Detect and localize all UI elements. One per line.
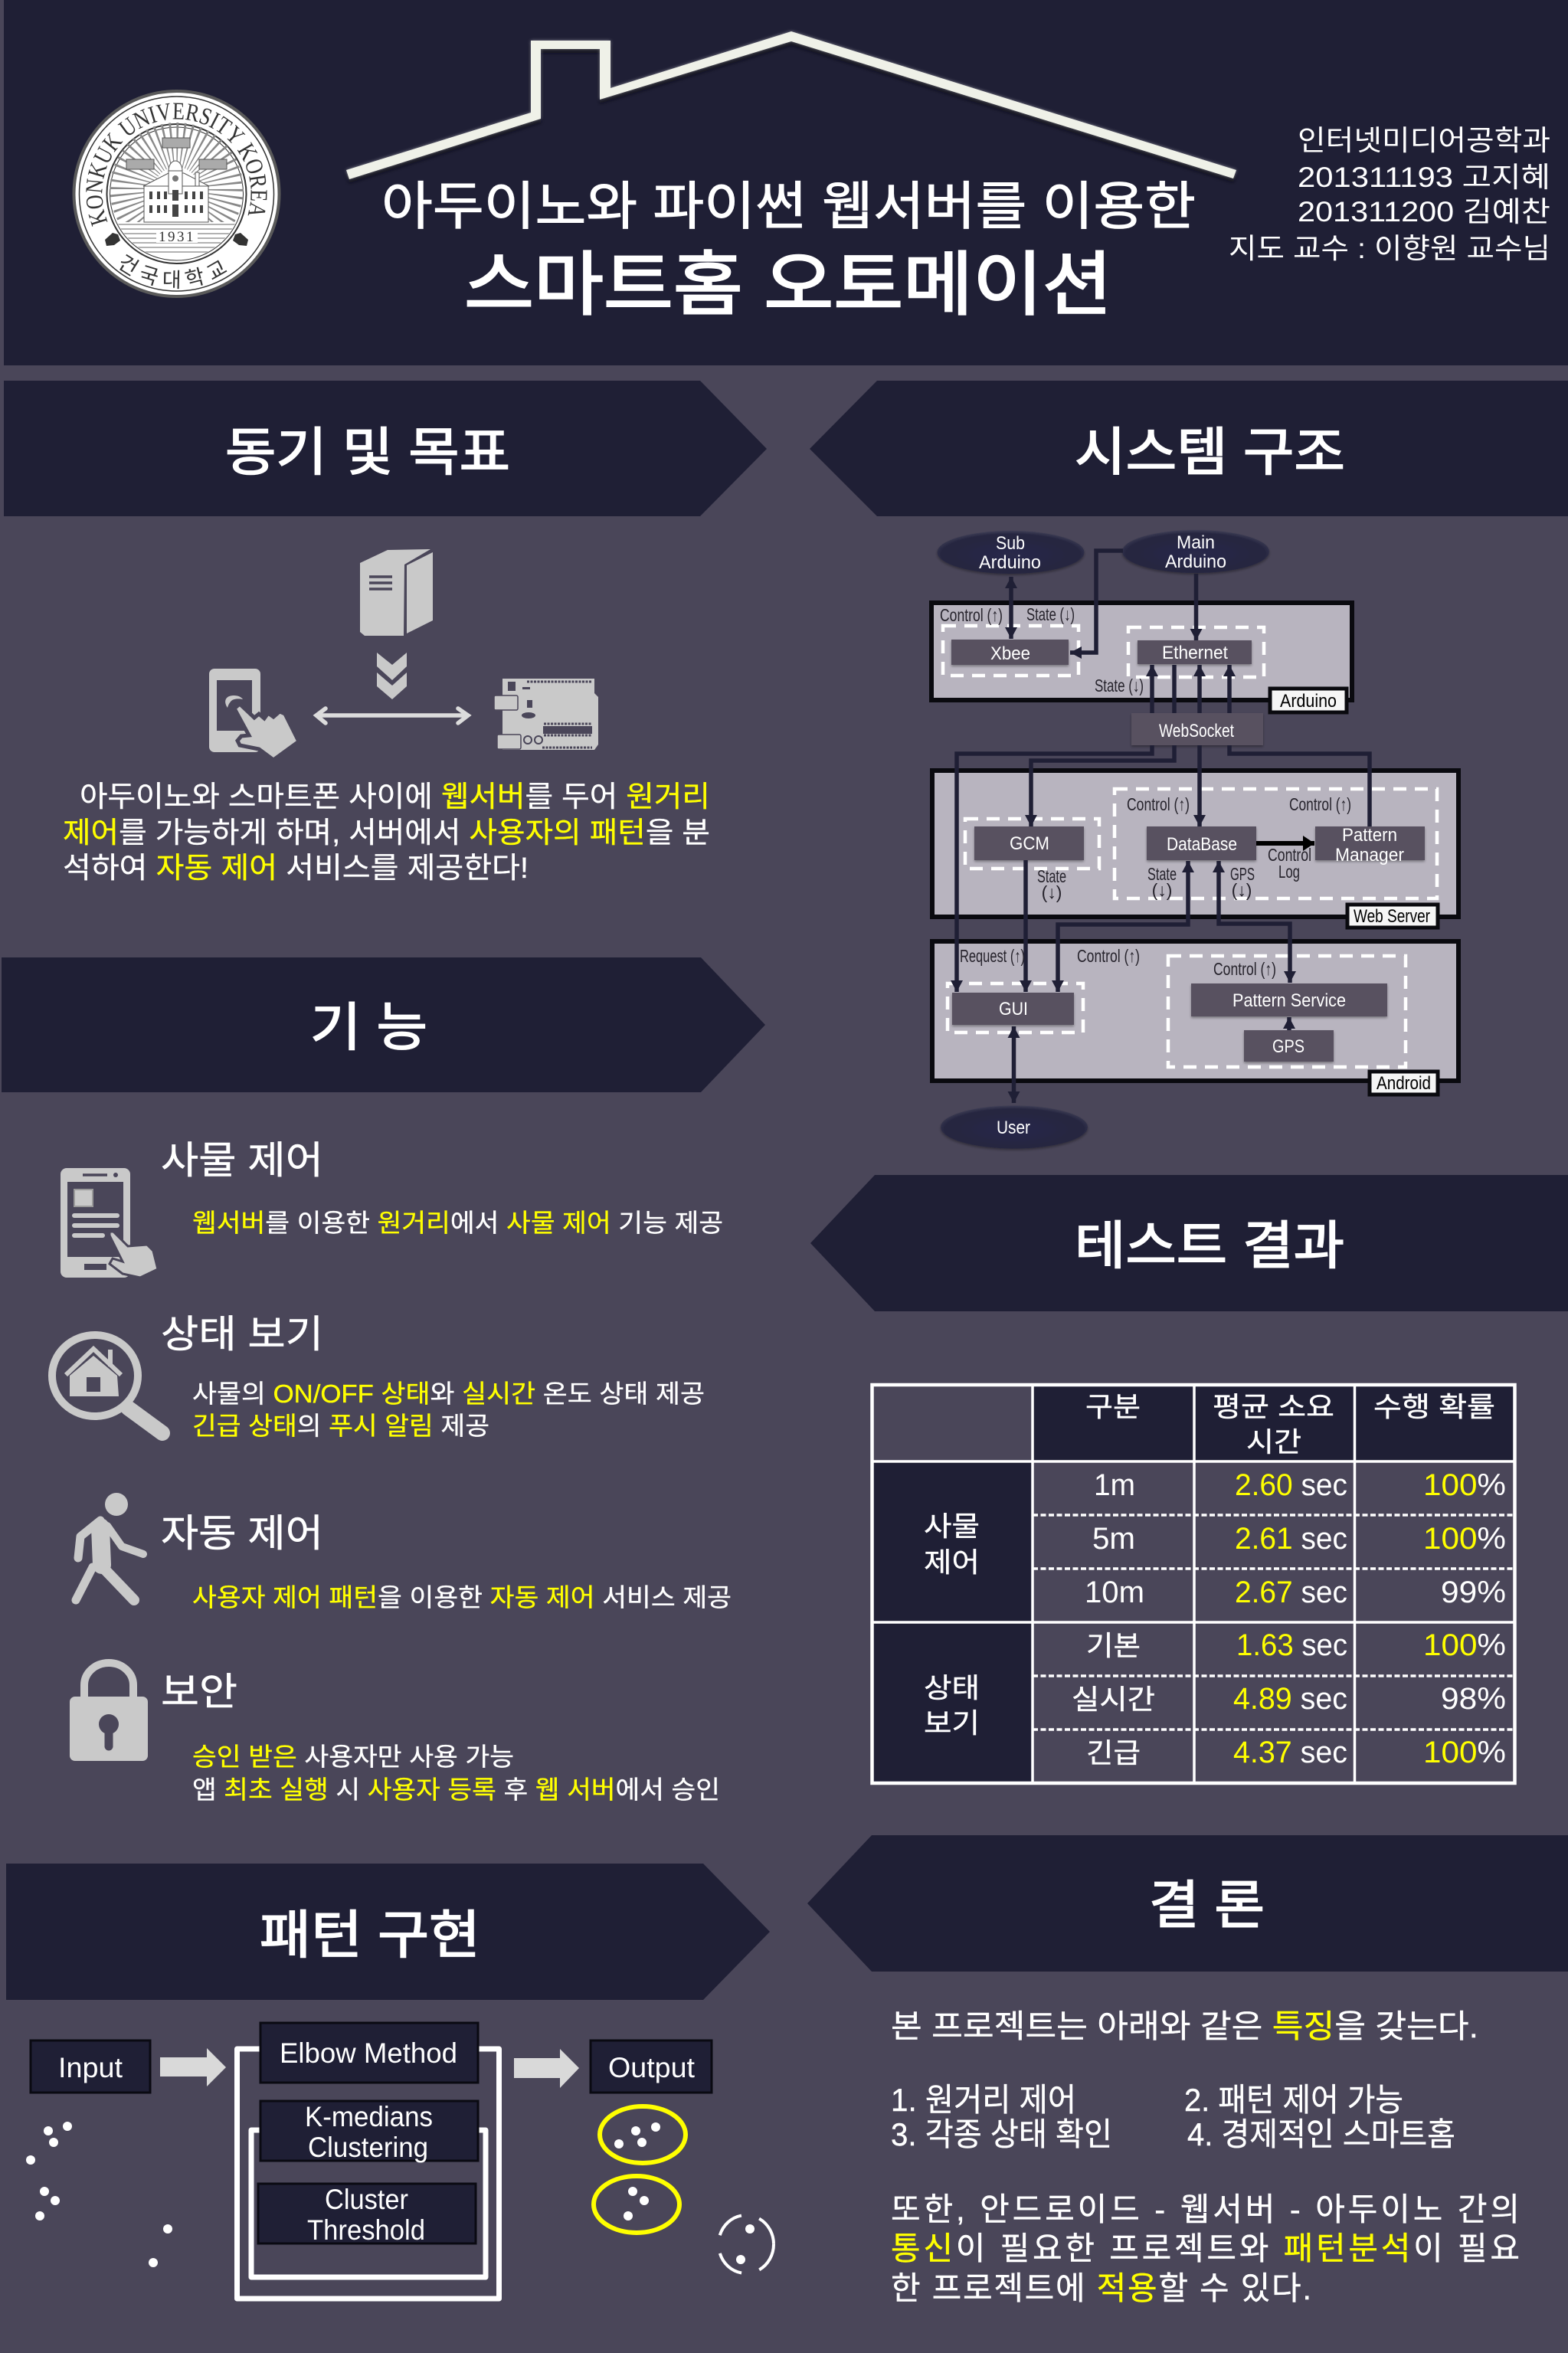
arrow: phone to arduino [316,709,468,723]
row: 1m: 2.60 sec [1235,1468,1347,1502]
panel: features [52,1139,732,1804]
box: websocket [1131,713,1263,745]
arrows [957,551,1370,1103]
row: 10m: 99% [1441,1576,1506,1609]
row group labels: 제어 [924,1546,980,1578]
diagram labels: Control (↑) [1213,959,1276,979]
banner: 결론 [807,1835,1568,1972]
panel: motivation [63,549,710,885]
text: 보안: 승인 받은 사용자만 사용 가능 [192,1743,514,1771]
diagram labels: State (↓) [1095,676,1144,695]
text block: conclusion: 4. 경제적인 스마트홈 [1187,2116,1455,2152]
heading: 보안: 보안 [161,1671,237,1713]
box: ethernet [1138,640,1252,664]
row: 5m: 2.61 sec [1235,1522,1347,1556]
arrow: process to output [514,2049,579,2088]
icon: double chevron [377,653,407,699]
banner: 시스템 구조 [810,381,1568,516]
banner: 기능 [2,957,765,1092]
text: motivation: 석하여 자동 제어 서비스를 제공한다! [63,853,529,885]
chart: pattern flow [26,2023,774,2299]
seal lettering [86,103,267,290]
main title [381,178,1196,324]
box: input: Input [58,2052,123,2083]
main title: 아두이노와 파이썬 웹서버를 이용한 [381,178,1196,236]
ellipse: main arduino: Main [1177,532,1215,553]
row: 기본: 100% [1423,1628,1506,1662]
row: 기본: 1.63 sec [1236,1628,1347,1662]
ellipse: sub arduino: Arduino [979,552,1041,573]
diagram labels: State (↓) [1026,604,1075,624]
row: 10m: 10m [1085,1576,1144,1609]
box: websocket: WebSocket [1159,721,1234,741]
authors: 지도 교수 : 이향원 교수님 [1229,233,1550,264]
heading: 사물 제어: 사물 제어 [161,1139,323,1182]
text block: conclusion: 또한, 안드로이드 - 웹서버 - 아두이노 간의 [891,2191,1520,2227]
box: k-medians clustering [260,2101,478,2163]
text: 상태 보기: 긴급 상태의 푸시 알림 제공 [192,1412,489,1440]
box: k-medians clustering: Clustering [308,2132,428,2163]
text: 자동 제어: 사용자 제어 패턴 을 이용한 자동 제어 서비스 제공 [192,1583,732,1612]
banner: 패턴 구현: 패턴 구현 [260,1906,480,1965]
box: gps [1244,1030,1334,1062]
row: 5m [1092,1522,1506,1556]
ellipse: main arduino [1122,530,1269,573]
row group labels: 보기 [924,1707,980,1739]
banner: 패턴 구현 [6,1864,770,2000]
main title: 스마트홈 오토메이션 [464,247,1112,324]
diagram labels: Control (↑) [1289,794,1351,814]
seal water lines [111,224,242,252]
table headers: 수행 확률 [1373,1391,1495,1422]
text: 상태 보기 [192,1379,705,1440]
box: database: DataBase [1167,834,1237,855]
box: xbee: Xbee [990,643,1030,664]
text: 사물 제어: 웹서버를 이용한 원거리에서 사물 제어 기능 제공 [192,1209,723,1237]
box: output [591,2040,712,2093]
row: 5m: 100% [1423,1522,1506,1556]
row: 1m: 100% [1423,1468,1506,1502]
seal animals [105,233,248,246]
row: 기본: 기본 [1086,1630,1141,1661]
box: gps: GPS [1272,1036,1304,1057]
box: database [1147,826,1256,860]
box: cluster threshold: Cluster [325,2184,408,2215]
loop frame: inner [251,2130,486,2277]
icon: magnifier house [52,1335,162,1433]
diagram labels: Log [1278,862,1300,882]
diagram labels: Request (↑) [960,946,1025,966]
ellipse: sub arduino: Sub [996,533,1025,554]
table: test results [871,1384,1516,1784]
box: pattern manager [1315,825,1425,866]
box: ethernet: Ethernet [1162,643,1228,663]
diagram labels: Control (↑) [940,605,1003,625]
text block: conclusion: 3. 각종 상태 확인 [891,2116,1112,2152]
row: 긴급 [1086,1736,1506,1769]
row: 긴급: 4.37 sec [1233,1736,1347,1769]
system box: android [932,941,1458,1081]
text: motivation: 아두이노와 스마트폰 사이에 웹서버를 두어 원거리 [80,781,710,813]
box: pattern manager: Pattern [1342,825,1397,846]
box: cluster threshold [258,2184,476,2246]
output clusters [594,2106,774,2273]
row: 1m: 1m [1094,1468,1135,1502]
diagram labels: (↓) [1042,882,1062,902]
box: gcm [974,826,1084,860]
table headers: 시간 [1246,1426,1301,1458]
box: gcm: GCM [1010,833,1049,854]
box: pattern service: Pattern Service [1232,990,1346,1011]
icon: phone touch [209,669,299,760]
banner: 테스트 결과 [810,1175,1568,1311]
ellipse: user [941,1106,1088,1149]
box: elbow method: Elbow Method [280,2037,457,2069]
table headers: 구분 [1085,1391,1141,1422]
text block: conclusion: 1. 원거리 제어 [891,2082,1076,2118]
text: 보안 [192,1743,720,1804]
row: 실시간: 4.89 sec [1233,1682,1347,1716]
authors: 201311200 김예찬 [1298,196,1550,227]
table headers: 평균 소요 [1213,1391,1334,1422]
header panel [4,0,1568,365]
row: 실시간: 98% [1441,1682,1506,1716]
chart: system architecture diagram [931,530,1458,1149]
heading: 자동 제어: 자동 제어 [161,1512,323,1555]
authors [1229,125,1550,264]
tag: android: Android [1377,1073,1431,1094]
ellipse: sub arduino [938,531,1085,574]
roof outline [346,31,1236,183]
university seal [72,90,280,298]
text: 보안: 앱 최초 실행 시 사용자 등록 후 웹 서버에서 승인 [192,1775,720,1804]
box: xbee [951,640,1069,665]
box: k-medians clustering: K-medians [305,2101,433,2132]
diagram labels: (↓) [1152,880,1172,900]
loop frame: outer [237,2049,499,2299]
box: cluster threshold: Threshold [307,2214,425,2246]
tag: web server: Web Server [1354,906,1430,927]
row: 10m [1085,1576,1506,1609]
row: 실시간 [1072,1682,1506,1716]
authors: 201311193 고지혜 [1298,162,1550,193]
box: elbow method [260,2023,478,2083]
seal year: 1931 [159,229,195,245]
header fills [871,1384,1516,1784]
banner: 테스트 결과: 테스트 결과 [1075,1217,1344,1275]
row: 1m [1094,1468,1506,1502]
authors: 인터넷미디어공학과 [1298,125,1550,156]
box: gui [952,993,1074,1025]
seal books [126,138,227,169]
seal building [143,161,209,222]
icon: walker [76,1493,143,1600]
text: motivation: 제어를 가능하게 하며, 서버에서 사용자의 패턴 을 분 [63,817,710,849]
dashed groups [943,626,1437,1067]
diagram labels: (↓) [1232,880,1252,900]
system box: web server [932,771,1458,917]
system box: arduino [931,603,1352,700]
ellipse: user: User [997,1118,1030,1138]
diagram labels: GPS [1230,864,1255,884]
banner: 동기 및 목표: 동기 및 목표 [225,424,510,482]
icon: arduino board [494,679,598,750]
text block: conclusion: 본 프로젝트는 아래와 같은 특징을 갖는다. [891,2008,1478,2044]
diagram labels: State [1147,864,1177,884]
box: pattern manager: Manager [1335,845,1404,866]
diagram labels: Control (↑) [1077,946,1140,966]
row group labels [924,1510,980,1739]
icon: server [360,549,433,636]
diagram labels [940,604,1351,979]
text block: conclusion: 2. 패턴 제어 가능 [1184,2082,1403,2118]
banner: 시스템 구조: 시스템 구조 [1075,424,1345,482]
text: motivation [63,781,710,885]
banner: 기능: 기 능 [310,999,427,1057]
seal lettering: 건국대학교 [119,254,227,290]
text block: conclusion: 한 프로젝트에 적용할 수 있다. [891,2270,1311,2306]
banner: 동기 및 목표 [4,381,767,516]
row: 기본 [1086,1628,1506,1662]
heading: 상태 보기: 상태 보기 [161,1313,323,1356]
diagram labels: Control (↑) [1127,794,1190,814]
grid lines [871,1384,1516,1784]
tag: arduino: Arduino [1280,691,1337,712]
box: pattern service [1191,983,1387,1016]
table headers [1085,1391,1495,1458]
row group labels: 사물 [924,1510,980,1542]
row: 5m: 5m [1092,1522,1135,1556]
arrow: input to process [160,2048,226,2086]
text block: conclusion [891,2008,1520,2306]
banner: 결론: 결 론 [1149,1877,1265,1935]
text block: conclusion: 통신이 필요한 프로젝트와 패턴분석이 필요 [891,2230,1520,2266]
box: input [31,2040,150,2093]
row: 실시간: 실시간 [1072,1684,1155,1715]
row: 긴급: 100% [1423,1736,1506,1769]
seal lettering: KONKUK UNIVERSITY KOREA [86,103,267,227]
icon: phone [61,1168,158,1278]
input points [26,2122,172,2267]
diagram labels: State [1037,866,1066,886]
ellipse: main arduino: Arduino [1165,551,1226,572]
row: 10m: 2.67 sec [1235,1576,1347,1609]
icon: lock [70,1663,148,1761]
row: 긴급: 긴급 [1086,1737,1141,1769]
diagram labels: Control [1268,845,1311,865]
box: gui: GUI [999,999,1028,1019]
row group labels: 상태 [924,1672,980,1703]
box: output: Output [608,2052,696,2083]
text: 상태 보기: 사물의 ON/OFF 상태 와 실시간 온도 상태 제공 [192,1379,705,1408]
